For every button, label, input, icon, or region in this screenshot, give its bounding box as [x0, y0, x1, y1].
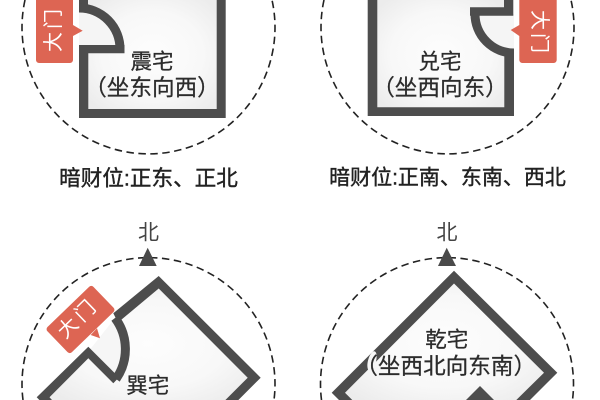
door callout	[45, 285, 116, 354]
dashed compass circle	[320, 258, 574, 400]
house label: （坐东向西）	[84, 76, 220, 100]
dashed compass circle	[22, 258, 275, 400]
house floor plan	[37, 276, 261, 400]
north label: 北	[436, 222, 458, 244]
house label	[355, 328, 536, 379]
door callout	[36, 0, 83, 63]
door callout: 大门	[53, 293, 103, 343]
house floor plan	[332, 271, 557, 400]
door callout: 大门	[528, 10, 551, 56]
dashed compass circle	[321, 0, 574, 154]
north label: 北	[138, 222, 159, 244]
north marker triangle	[438, 248, 456, 266]
dashed compass circle	[22, 0, 275, 154]
house label: 兑宅	[418, 50, 462, 74]
panel: 震宅	[22, 0, 275, 190]
house label: 震宅	[130, 50, 174, 74]
house label: （坐西向东）	[372, 76, 508, 100]
house label	[84, 50, 220, 100]
house label	[372, 50, 508, 100]
panel: 乾宅	[320, 222, 574, 400]
caption: 暗财位:正南、东南、西北	[329, 166, 566, 190]
caption: 暗财位:正东、正北	[59, 166, 238, 190]
north marker triangle	[139, 248, 157, 266]
house label: （坐西北向东南）	[355, 354, 536, 379]
house label: 乾宅	[425, 328, 468, 352]
door callout: 大门	[42, 6, 65, 52]
panel: 兑宅	[321, 0, 574, 190]
house floor plan	[368, 0, 514, 116]
house floor plan	[79, 0, 226, 118]
door callout	[511, 0, 557, 63]
house label: 巽宅	[126, 374, 169, 398]
panel: 巽宅	[22, 222, 275, 400]
